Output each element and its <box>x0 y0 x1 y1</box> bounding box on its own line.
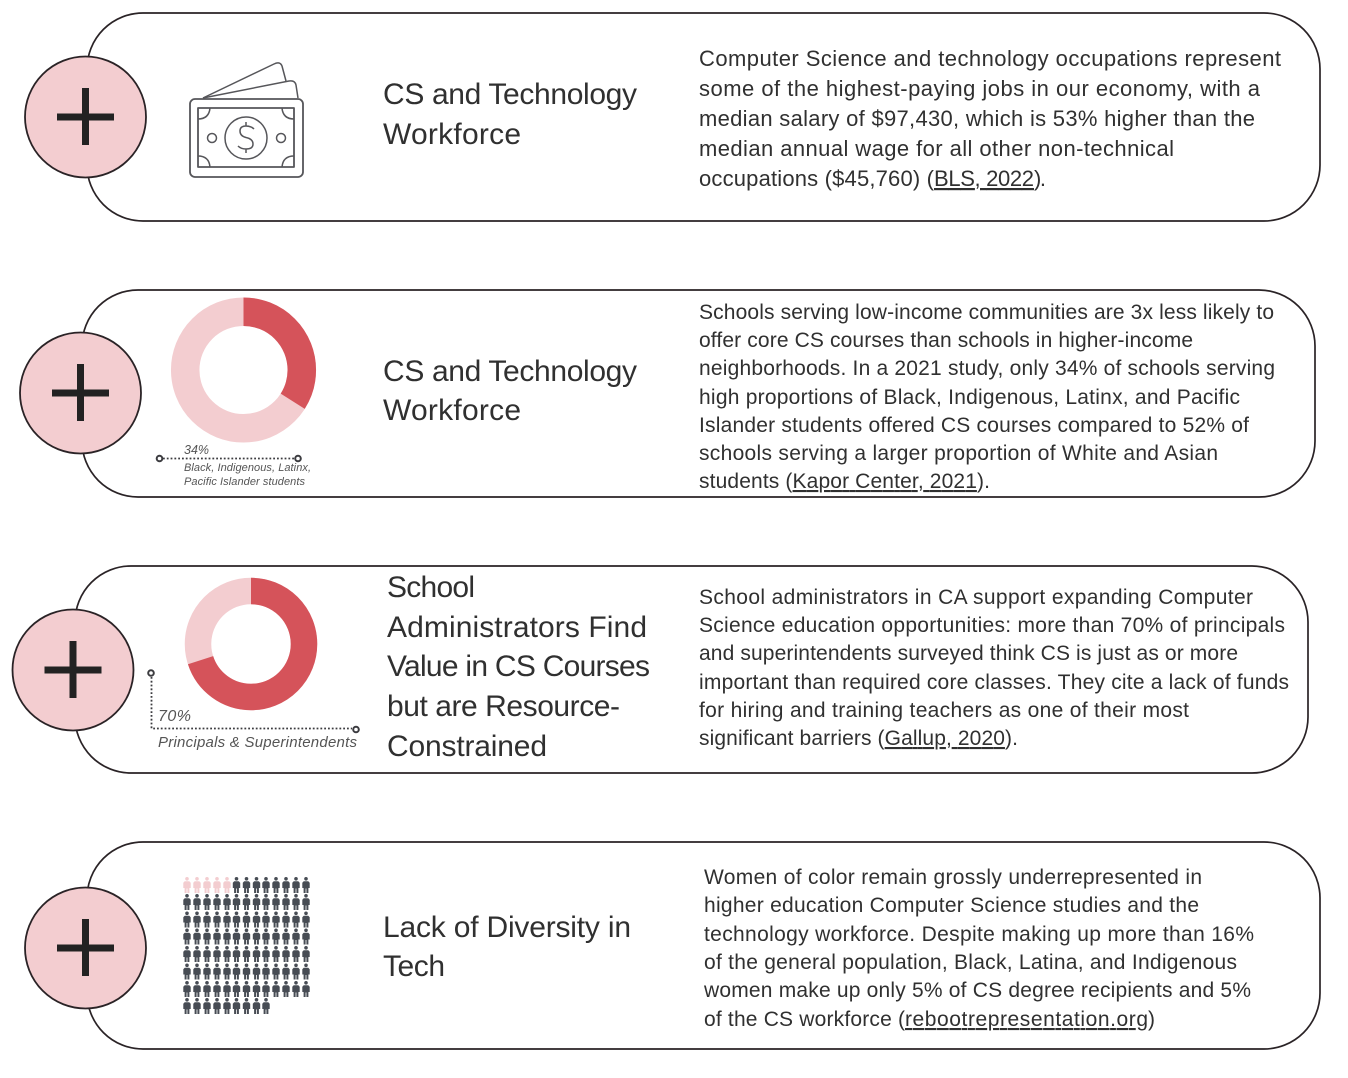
pictogram: people grid <box>183 877 310 1014</box>
donut chart: 34% <box>185 312 302 428</box>
text block 3: Science education opportunities: more than 70% of principals <box>699 614 1285 637</box>
heading 3: Constrained <box>387 730 547 763</box>
text block 4: ) <box>1148 1008 1155 1031</box>
panel: CS and Technology Workforce salary <box>25 13 1320 221</box>
heading 1: CS and Technology <box>383 78 637 111</box>
text block 2: students (Kapor Center, 2021). <box>699 470 990 493</box>
expand button 4 <box>25 888 146 1008</box>
heading 3: Value in CS Courses <box>387 650 650 683</box>
heading 4: Lack of Diversity in <box>383 911 631 944</box>
chart callout: 34% <box>157 443 311 488</box>
text block 1: BLS, 2022 <box>934 166 1034 191</box>
text block 4: of the general population, Black, Latina, and Indigenous <box>704 951 1237 974</box>
panel outline 4 <box>87 842 1320 1049</box>
text block 3: and superintendents surveyed think CS is just as or more <box>699 642 1238 665</box>
row 1 <box>183 877 310 893</box>
expand button 3 <box>12 610 134 730</box>
text block 4: of the CS workforce ( <box>704 1008 905 1031</box>
text block 1: median annual wage for all other non-technical <box>699 136 1174 161</box>
text block 1: some of the highest-paying jobs in our economy, with a <box>699 76 1261 101</box>
text block 2: Islander students offered CS courses compared to 52% of <box>699 414 1249 437</box>
text block 2: high proportions of Black, Indigenous, Latinx, and Pacific <box>699 386 1240 409</box>
text block 2 <box>699 301 1275 493</box>
text block 3: significant barriers (Gallup, 2020). <box>699 727 1018 750</box>
text block 3: for hiring and training teachers as one of their most <box>699 699 1189 722</box>
chart callout: 70%: 70% <box>158 708 191 725</box>
panel outline 3 <box>75 566 1308 773</box>
text block 2: Schools serving low-income communities are 3x less likely to <box>699 301 1274 324</box>
text block 1: occupations ($45,760) ( <box>699 166 935 191</box>
donut chart: 70% <box>198 591 304 697</box>
text block 2: schools serving a larger proportion of White and Asian <box>699 442 1218 465</box>
panel outline 1 <box>87 13 1320 221</box>
text block 2: neighborhoods. In a 2021 study, only 34% of schools serving <box>699 357 1275 380</box>
heading 4: Tech <box>383 950 445 983</box>
heading 3: Administrators Find <box>387 611 647 644</box>
text block 4 <box>703 866 1254 1031</box>
expand button 1 <box>25 56 146 178</box>
chart callout: 70%: Principals & Superintendents <box>158 734 358 751</box>
chart callout: 34%: Black, Indigenous, Latinx, <box>184 462 311 474</box>
text block 4: Women of color remain grossly underrepresented in <box>704 866 1202 889</box>
heading 3: School <box>387 571 475 604</box>
expand button 2 <box>20 332 141 454</box>
text block 1: Computer Science and technology occupations represent <box>699 46 1281 71</box>
panel: schools serving low-income communities <box>20 290 1315 497</box>
text block 4: rebootrepresentation.org <box>905 1008 1148 1031</box>
text block 3: important than required core classes. They cite a lack of funds <box>699 671 1289 694</box>
chart callout: 34%: 34% <box>184 443 209 457</box>
text block 4: higher education Computer Science studies and the <box>704 894 1199 917</box>
panel: school administrators <box>12 566 1308 773</box>
text block 1 <box>699 46 1281 191</box>
icon: money bills <box>190 63 303 177</box>
chart callout: 70% <box>148 670 359 751</box>
text block 1: ). <box>1034 166 1046 191</box>
text block 1: median salary of $97,430, which is 53% higher than the <box>699 106 1255 131</box>
text block 3: School administrators in CA support expanding Computer <box>699 586 1253 609</box>
heading 3: but are Resource- <box>387 690 620 723</box>
panel outline 2 <box>82 290 1315 497</box>
text block 3 <box>699 586 1289 750</box>
text block 2: offer core CS courses than schools in higher-income <box>699 329 1193 352</box>
heading 2: CS and Technology <box>383 355 637 388</box>
heading 2: Workforce <box>383 394 521 427</box>
chart callout: 34%: Pacific Islander students <box>184 476 306 488</box>
heading 1: Workforce <box>383 118 521 151</box>
text block 4: women make up only 5% of CS degree recipients and 5% <box>703 979 1251 1002</box>
panel: lack of diversity <box>25 842 1320 1049</box>
text block 4: technology workforce. Despite making up more than 16% <box>704 923 1254 946</box>
